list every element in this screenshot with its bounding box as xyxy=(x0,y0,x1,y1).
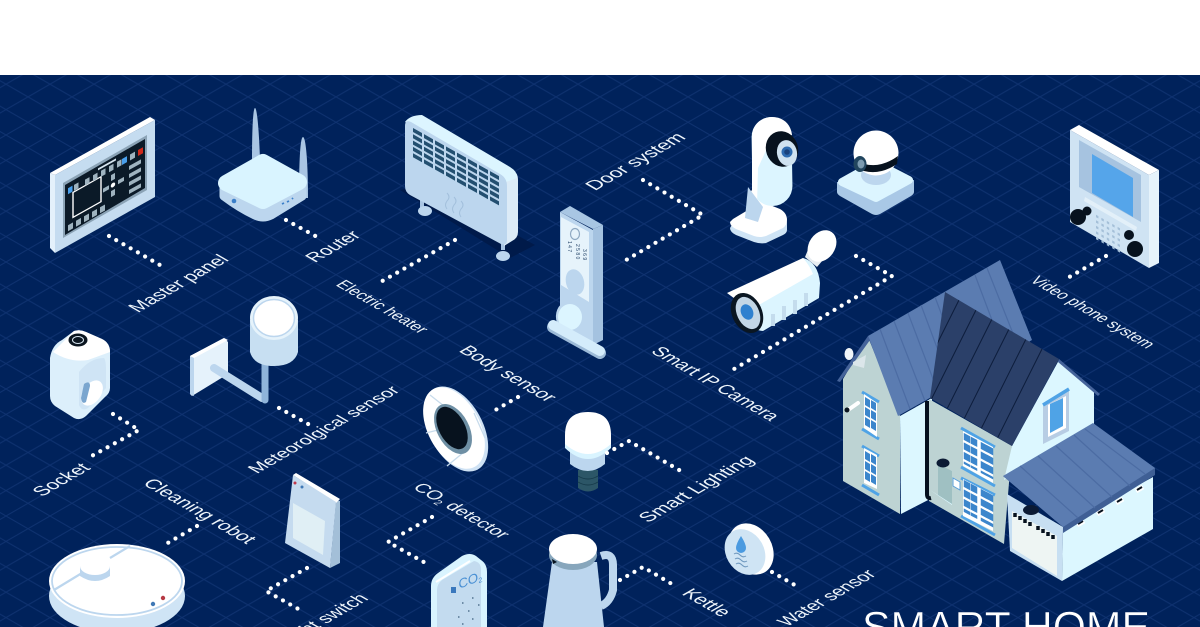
icon: kettle xyxy=(543,534,613,627)
label: Cleaning robot: Cleaning robot xyxy=(138,476,261,547)
label: Kettle: Kettle xyxy=(677,586,736,620)
icon: water sensor xyxy=(717,515,783,583)
centre windows xyxy=(961,428,995,535)
label: CO2 detector: 2 xyxy=(430,499,445,507)
dotted connector: cleaning robot xyxy=(166,526,197,544)
dotted connector: meteorological sensor xyxy=(279,408,310,425)
dotted connector: door system xyxy=(621,180,703,263)
dark main roof xyxy=(930,292,1059,446)
dotted connector: smart lighting xyxy=(607,441,686,474)
dotted connector: light switch xyxy=(266,568,307,611)
illustration: smart house xyxy=(837,260,1155,581)
rain pipe xyxy=(927,401,931,498)
dotted connector: smart IP camera xyxy=(729,256,892,372)
icon: door system lock xyxy=(551,206,603,353)
label: CO2 detector: detector xyxy=(437,496,515,541)
icon: CO2 detector: 2 xyxy=(478,575,483,585)
blue main roof xyxy=(837,260,1032,416)
porch xyxy=(930,458,960,505)
garage walls and door xyxy=(1007,477,1153,581)
garage lamp xyxy=(1023,505,1039,515)
dotted connector: water sensor xyxy=(772,572,800,588)
icon: router xyxy=(224,108,308,217)
label: CO2 detector: CO xyxy=(409,480,449,503)
garage roof xyxy=(1003,423,1155,533)
icon: door system lock: 2 5 8 0 xyxy=(574,244,580,260)
icon: dome camera xyxy=(837,130,914,215)
left wing walls xyxy=(843,337,932,514)
house camera and antenna xyxy=(844,348,866,412)
icon: bullet camera xyxy=(725,225,842,338)
label: Video phone system: Video phone system xyxy=(1026,273,1160,351)
label: Meteorolgical sensor: Meteorolgical sensor xyxy=(243,383,404,476)
icon: master panel xyxy=(50,117,155,253)
icon: video phone xyxy=(1070,125,1159,268)
icon: door system lock: 1 4 7 xyxy=(566,241,572,252)
icon: cleaning robot xyxy=(49,544,185,627)
left wing windows xyxy=(862,392,879,495)
icon: door system lock: 3 6 9 xyxy=(581,249,587,260)
icon: light switch xyxy=(285,473,340,568)
icon: meteorological sensor xyxy=(190,296,298,400)
centre walls xyxy=(929,359,1100,544)
dotted connector: CO2 detector xyxy=(388,517,432,565)
white top band xyxy=(0,0,1200,75)
dotted connector: master panel xyxy=(109,236,160,265)
dotted connector: electric heater xyxy=(377,240,455,284)
icon: body sensor xyxy=(410,376,501,482)
icon: smart lighting bulb xyxy=(565,412,611,492)
label: Door system: Door system xyxy=(581,130,691,194)
dotted connector: video phone xyxy=(1064,256,1106,280)
label: Master panel: Master panel xyxy=(124,252,234,316)
icon: socket xyxy=(50,330,110,419)
dormer window xyxy=(1043,389,1069,444)
icon: CO2 detector xyxy=(431,554,487,627)
label: Electric heater: Electric heater xyxy=(332,277,433,336)
dotted connector: kettle xyxy=(620,567,677,587)
label: Socket: Socket xyxy=(28,460,96,500)
label: Smart IP Camera: Smart IP Camera xyxy=(646,344,785,424)
label: Body sensor: Body sensor xyxy=(454,343,561,405)
label: Router: Router xyxy=(301,228,366,266)
dotted connector: router xyxy=(286,220,319,238)
dotted connector: socket xyxy=(88,414,139,458)
dotted connector: body sensor xyxy=(492,397,518,412)
icon: webcam xyxy=(730,117,803,243)
label: Smart Lighting: Smart Lighting xyxy=(634,453,760,526)
icon: CO2 detector: CO xyxy=(458,570,479,592)
icon: electric heater xyxy=(400,115,535,261)
